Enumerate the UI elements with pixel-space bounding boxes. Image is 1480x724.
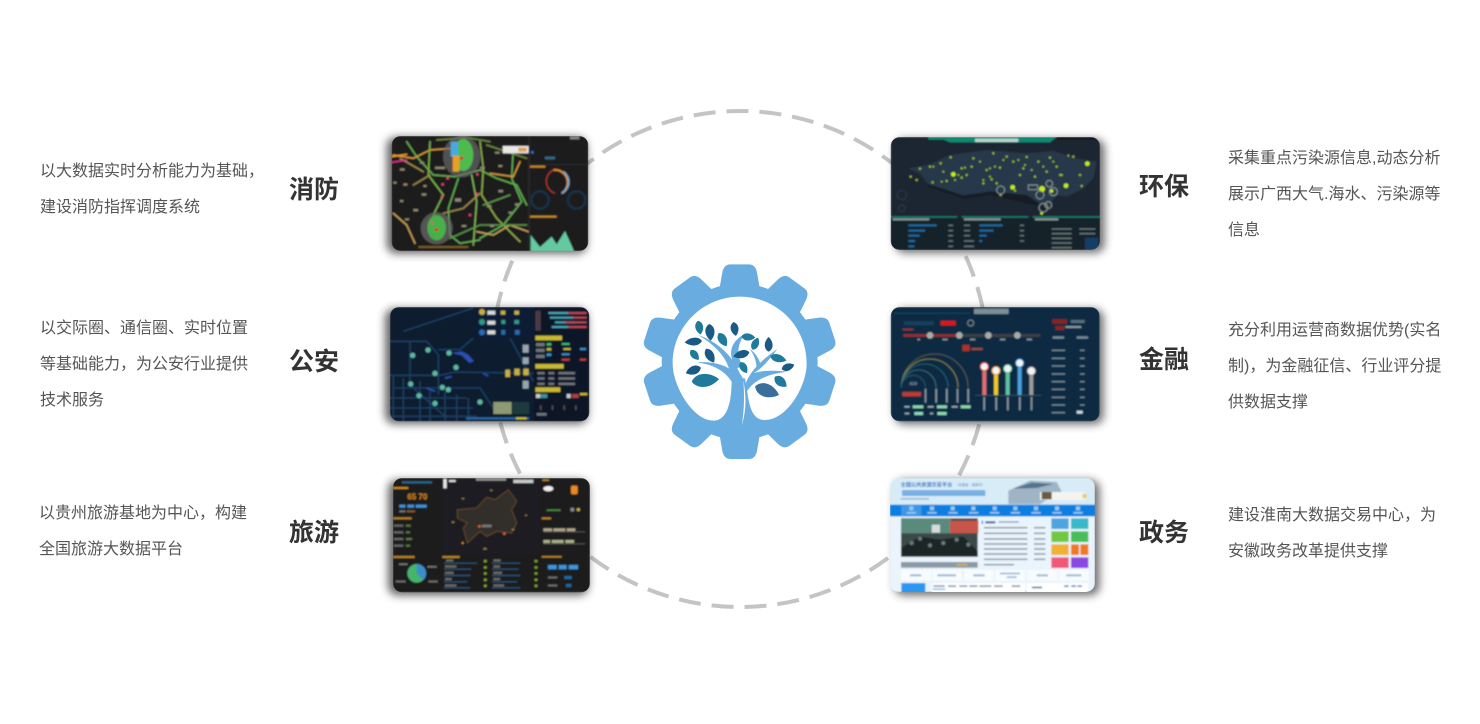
text block: 消防: 建设消防指挥调度系统 (40, 198, 200, 216)
text block: 环保 (1228, 149, 1440, 239)
text block: 公安 (40, 319, 248, 409)
text block: 旅游 (39, 504, 247, 558)
tree branches (697, 334, 787, 392)
text block: 政务 (1228, 506, 1436, 560)
text block: 金融: 制)，为金融征信、行业评分提 (1228, 357, 1441, 375)
panel: environment screenshot (891, 137, 1105, 253)
text block: 旅游: 全国旅游大数据平台 (39, 540, 183, 558)
panel: tourism screenshot: 65 70 (407, 492, 428, 501)
panel: fire screenshot (387, 136, 588, 254)
text block: 旅游: 以贵州旅游基地为中心，构建 (39, 504, 247, 522)
leaves (688, 320, 789, 390)
heading: 政务: 政务 (1139, 519, 1189, 547)
text block: 公安: 技术服务 (40, 391, 104, 409)
text block: 公安: 等基础能力，为公安行业提供 (40, 355, 248, 373)
panel: tourism screenshot (388, 478, 590, 595)
text block: 消防: 以大数据实时分析能力为基础， (40, 162, 264, 180)
text block: 公安: 以交际圈、通信圈、实时位置 (40, 319, 248, 337)
text block: 环保: 展示广西大气.海水、污染源等 (1228, 185, 1440, 203)
heading: 消防: 消防 (289, 176, 339, 204)
trunk highlight (742, 380, 745, 426)
panel: government screenshot: （安徽省 · 淮南市） (955, 482, 985, 487)
text block: 环保: 采集重点污染源信息,动态分析 (1228, 149, 1440, 167)
text block: 环保: 信息 (1228, 221, 1260, 239)
heading: 公安: 公安 (289, 348, 339, 376)
heading: 旅游: 旅游 (289, 519, 339, 547)
text block: 金融: 充分利用运营商数据优势(实名 (1228, 321, 1441, 339)
panel: finance screenshot (891, 307, 1104, 424)
text block: 政务: 安徽政务改革提供支撑 (1228, 542, 1388, 560)
text block: 政务: 建设淮南大数据交易中心，为 (1228, 506, 1436, 524)
dashed ring (492, 111, 988, 607)
gear body (641, 264, 838, 459)
gear hole (673, 297, 807, 421)
text block: 金融: 供数据支撑 (1228, 393, 1308, 411)
icon: gear with tree (641, 264, 838, 459)
panel: government screenshot: 全国公共资源交易平台 (901, 480, 952, 488)
panel: police screenshot (385, 307, 589, 424)
panel: government screenshot (890, 478, 1100, 595)
text block: 金融 (1228, 321, 1441, 411)
heading: 环保: 环保 (1139, 173, 1189, 201)
panel: finance screenshot: 428 (909, 381, 918, 386)
heading: 金融: 金融 (1139, 346, 1189, 374)
text block: 消防 (40, 162, 264, 216)
